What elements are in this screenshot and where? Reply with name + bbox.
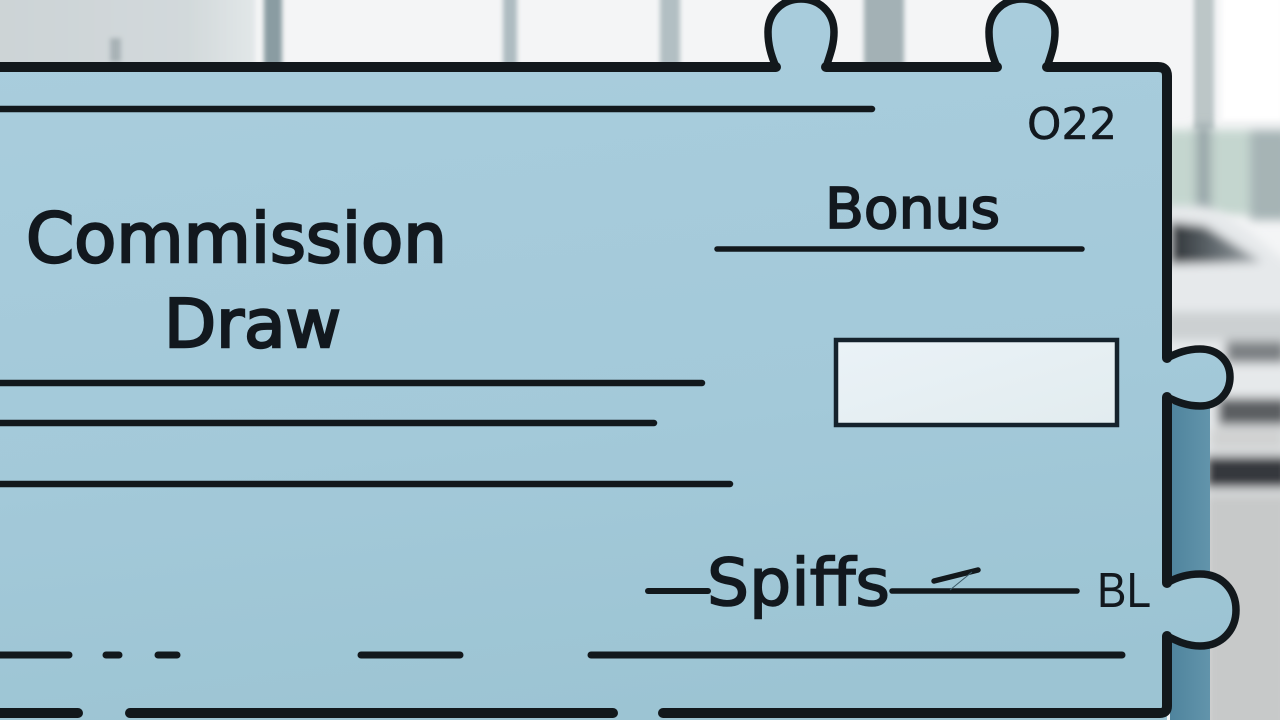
heading: Commission Draw: Draw bbox=[164, 285, 341, 363]
bottom dashed line bbox=[0, 652, 1122, 658]
label: Spiffs with signature line bbox=[648, 546, 1077, 621]
heading: Commission Draw bbox=[26, 199, 447, 363]
label: Bonus: Bonus bbox=[825, 177, 1000, 242]
label: BL: BL bbox=[1097, 564, 1151, 618]
amount box bbox=[836, 340, 1117, 425]
top memo line bbox=[0, 106, 872, 112]
shadow behind check edge bbox=[1170, 404, 1210, 720]
bonus underline bbox=[717, 246, 1082, 252]
check number: O22 bbox=[1027, 99, 1117, 150]
heading: Commission Draw: Commission bbox=[26, 199, 447, 279]
label: Spiffs with signature line: Spiffs bbox=[707, 546, 890, 621]
text lines bbox=[0, 383, 730, 484]
